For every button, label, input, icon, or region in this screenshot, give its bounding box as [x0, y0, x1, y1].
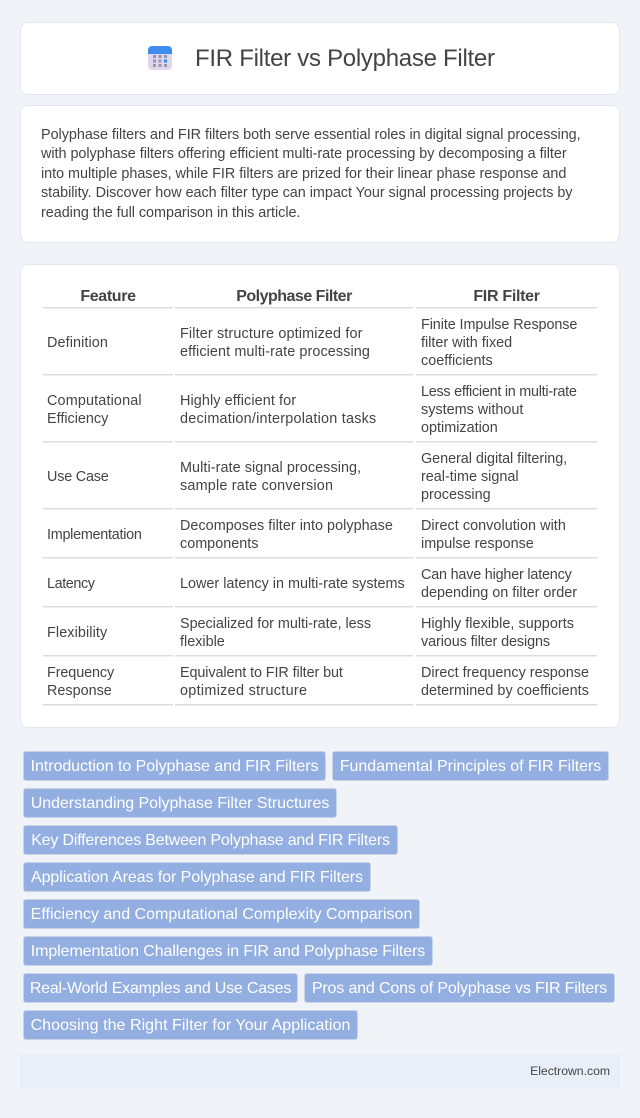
- chip: [23, 788, 337, 818]
- row: flexibility: [43, 616, 597, 657]
- title: FIR Filter vs Polyphase Filter: [195, 45, 495, 72]
- row: use case: processing: [421, 487, 491, 503]
- row: implementation: impulse response: [421, 536, 534, 552]
- row: computational efficiency: optimization: [421, 420, 498, 436]
- chip: [23, 899, 420, 929]
- chip: Real-World Examples and Use Cases: [30, 980, 291, 997]
- row: flexibility: Highly flexible, supports: [421, 616, 574, 632]
- row: computational efficiency: Highly efficient for: [180, 393, 296, 409]
- chip: Implementation Challenges in FIR and Polyphase Filters: [31, 943, 425, 960]
- row: frequency response: Direct frequency response: [421, 665, 589, 681]
- chip: [304, 973, 615, 1003]
- icon: calendar grid: [148, 46, 172, 70]
- chip: Key Differences Between Polyphase and FIR Filters: [31, 832, 390, 849]
- row: use case: [43, 451, 597, 510]
- intro text: [41, 127, 581, 221]
- row: implementation: [43, 518, 597, 559]
- row: definition: efficient multi-rate processing: [180, 344, 370, 360]
- chip: [23, 825, 398, 855]
- row: use case: General digital filtering,: [421, 451, 567, 467]
- row: computational efficiency: Computational: [47, 393, 142, 409]
- row: flexibility: flexible: [180, 634, 225, 650]
- chip: [23, 936, 433, 966]
- footer bar: [20, 1054, 620, 1088]
- row: latency: Latency: [47, 576, 95, 592]
- row: implementation: Implementation: [47, 527, 142, 543]
- row: use case: Multi-rate signal processing,: [180, 460, 361, 476]
- chip: Application Areas for Polyphase and FIR Filters: [31, 869, 363, 886]
- section link chips: [23, 751, 615, 1040]
- row: use case: Use Case: [47, 469, 109, 485]
- intro text: reading the full comparison in this article.: [41, 205, 300, 221]
- table header: FIR Filter: [473, 288, 540, 305]
- row: flexibility: Flexibility: [47, 625, 107, 641]
- chip: Choosing the Right Filter for Your Application: [31, 1017, 350, 1034]
- table header: Feature: [80, 288, 136, 305]
- row: definition: [43, 317, 597, 376]
- intro text: stability. Discover how each filter type can impact Your signal processing projects by: [41, 185, 572, 201]
- header card: [20, 22, 620, 95]
- table header: Polyphase Filter: [236, 288, 352, 305]
- chip: Understanding Polyphase Filter Structures: [31, 795, 329, 812]
- chip: Introduction to Polyphase and FIR Filters: [31, 758, 318, 775]
- row: latency: [43, 567, 597, 608]
- row: latency: Lower latency in multi-rate systems: [180, 576, 405, 592]
- row: frequency response: Equivalent to FIR filter but: [180, 665, 343, 681]
- row: frequency response: [43, 665, 597, 706]
- row: definition: Definition: [47, 335, 108, 351]
- comparison table panel: [20, 264, 620, 728]
- row: definition: coefficients: [421, 353, 493, 369]
- row: implementation: Decomposes filter into polyphase: [180, 518, 393, 534]
- row: latency: Can have higher latency: [421, 567, 572, 583]
- row: computational efficiency: Less efficient in multi-rate: [421, 384, 577, 400]
- footer source text: Electrown.com: [530, 1064, 610, 1078]
- row: implementation: components: [180, 536, 258, 552]
- row: computational efficiency: decimation/interpolation tasks: [180, 411, 376, 427]
- row: implementation: Direct convolution with: [421, 518, 566, 534]
- row: latency: depending on filter order: [421, 585, 577, 601]
- row: frequency response: optimized structure: [180, 683, 307, 699]
- intro text: into multiple phases, while FIR filters are prized for their linear phase response and: [41, 166, 566, 182]
- row: use case: real-time signal: [421, 469, 519, 485]
- row: definition: Finite Impulse Response: [421, 317, 577, 333]
- chip: Efficiency and Computational Complexity Comparison: [31, 906, 412, 923]
- row: computational efficiency: systems without: [421, 402, 523, 418]
- row: definition: Filter structure optimized for: [180, 326, 363, 342]
- chip: [23, 862, 371, 892]
- row: frequency response: determined by coefficients: [421, 683, 589, 699]
- row: frequency response: Response: [47, 683, 112, 699]
- intro text: with polyphase filters offering efficient multi-rate processing by decomposing a filter: [41, 146, 567, 162]
- table header: [43, 288, 597, 309]
- row: flexibility: Specialized for multi-rate, less: [180, 616, 371, 632]
- chip: [23, 751, 326, 781]
- row: flexibility: various filter designs: [421, 634, 550, 650]
- chip: Pros and Cons of Polyphase vs FIR Filters: [312, 980, 607, 997]
- row: computational efficiency: [43, 384, 597, 443]
- intro text: Polyphase filters and FIR filters both serve essential roles in digital signal processing,: [41, 127, 581, 143]
- row: computational efficiency: Efficiency: [47, 411, 108, 427]
- chip: [23, 973, 298, 1003]
- row: use case: sample rate conversion: [180, 478, 333, 494]
- row: frequency response: Frequency: [47, 665, 114, 681]
- chip: [23, 1010, 358, 1040]
- chip: [332, 751, 609, 781]
- chip: Fundamental Principles of FIR Filters: [340, 758, 601, 775]
- intro panel: [20, 105, 620, 243]
- row: definition: filter with fixed: [421, 335, 512, 351]
